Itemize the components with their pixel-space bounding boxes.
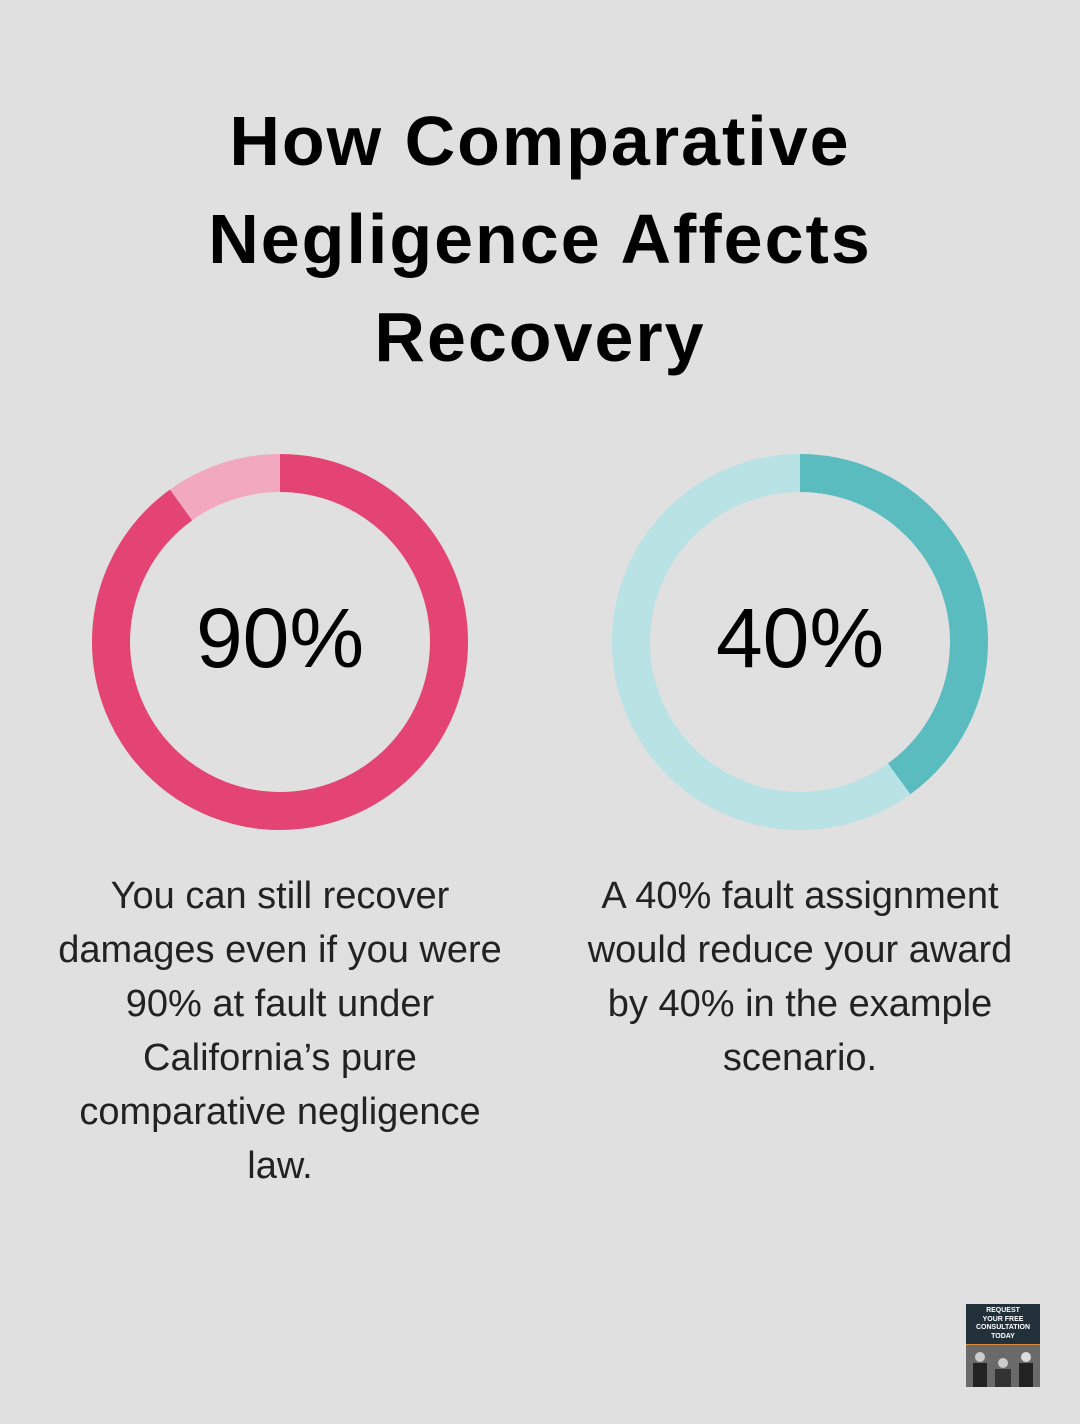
title	[208, 102, 872, 376]
caption: 90%: comparative negligence	[79, 1091, 481, 1133]
logo: consultation badge: TODAY	[991, 1332, 1015, 1340]
caption: 90%: 90% at fault under	[126, 983, 434, 1025]
caption: 90%: law.	[247, 1145, 313, 1187]
donut chart: 40%: 40%	[716, 591, 884, 685]
title: Negligence Affects	[208, 200, 872, 278]
caption: 40%: A 40% fault assignment	[601, 875, 999, 917]
donut chart: 90%: 90%	[196, 591, 364, 685]
caption: 90%	[58, 875, 502, 1187]
logo: consultation badge: CONSULTATION	[976, 1324, 1030, 1331]
logo: consultation badge: YOUR FREE	[983, 1316, 1023, 1322]
caption: 90%: California’s pure	[143, 1037, 417, 1079]
caption: 40%: scenario.	[723, 1037, 877, 1079]
caption: 90%: You can still recover	[111, 875, 449, 917]
caption: 40%: would reduce your award	[588, 929, 1012, 971]
donut chart: 40%	[612, 454, 988, 830]
logo: consultation badge	[966, 1304, 1040, 1384]
caption: 40%	[588, 875, 1012, 1079]
caption: 90%: damages even if you were	[58, 929, 502, 971]
donut chart: 90%	[92, 454, 468, 830]
logo: consultation badge: REQUEST	[986, 1307, 1020, 1314]
title: Recovery	[374, 298, 706, 376]
title: How Comparative	[229, 102, 851, 180]
caption: 40%: by 40% in the example	[608, 983, 992, 1025]
